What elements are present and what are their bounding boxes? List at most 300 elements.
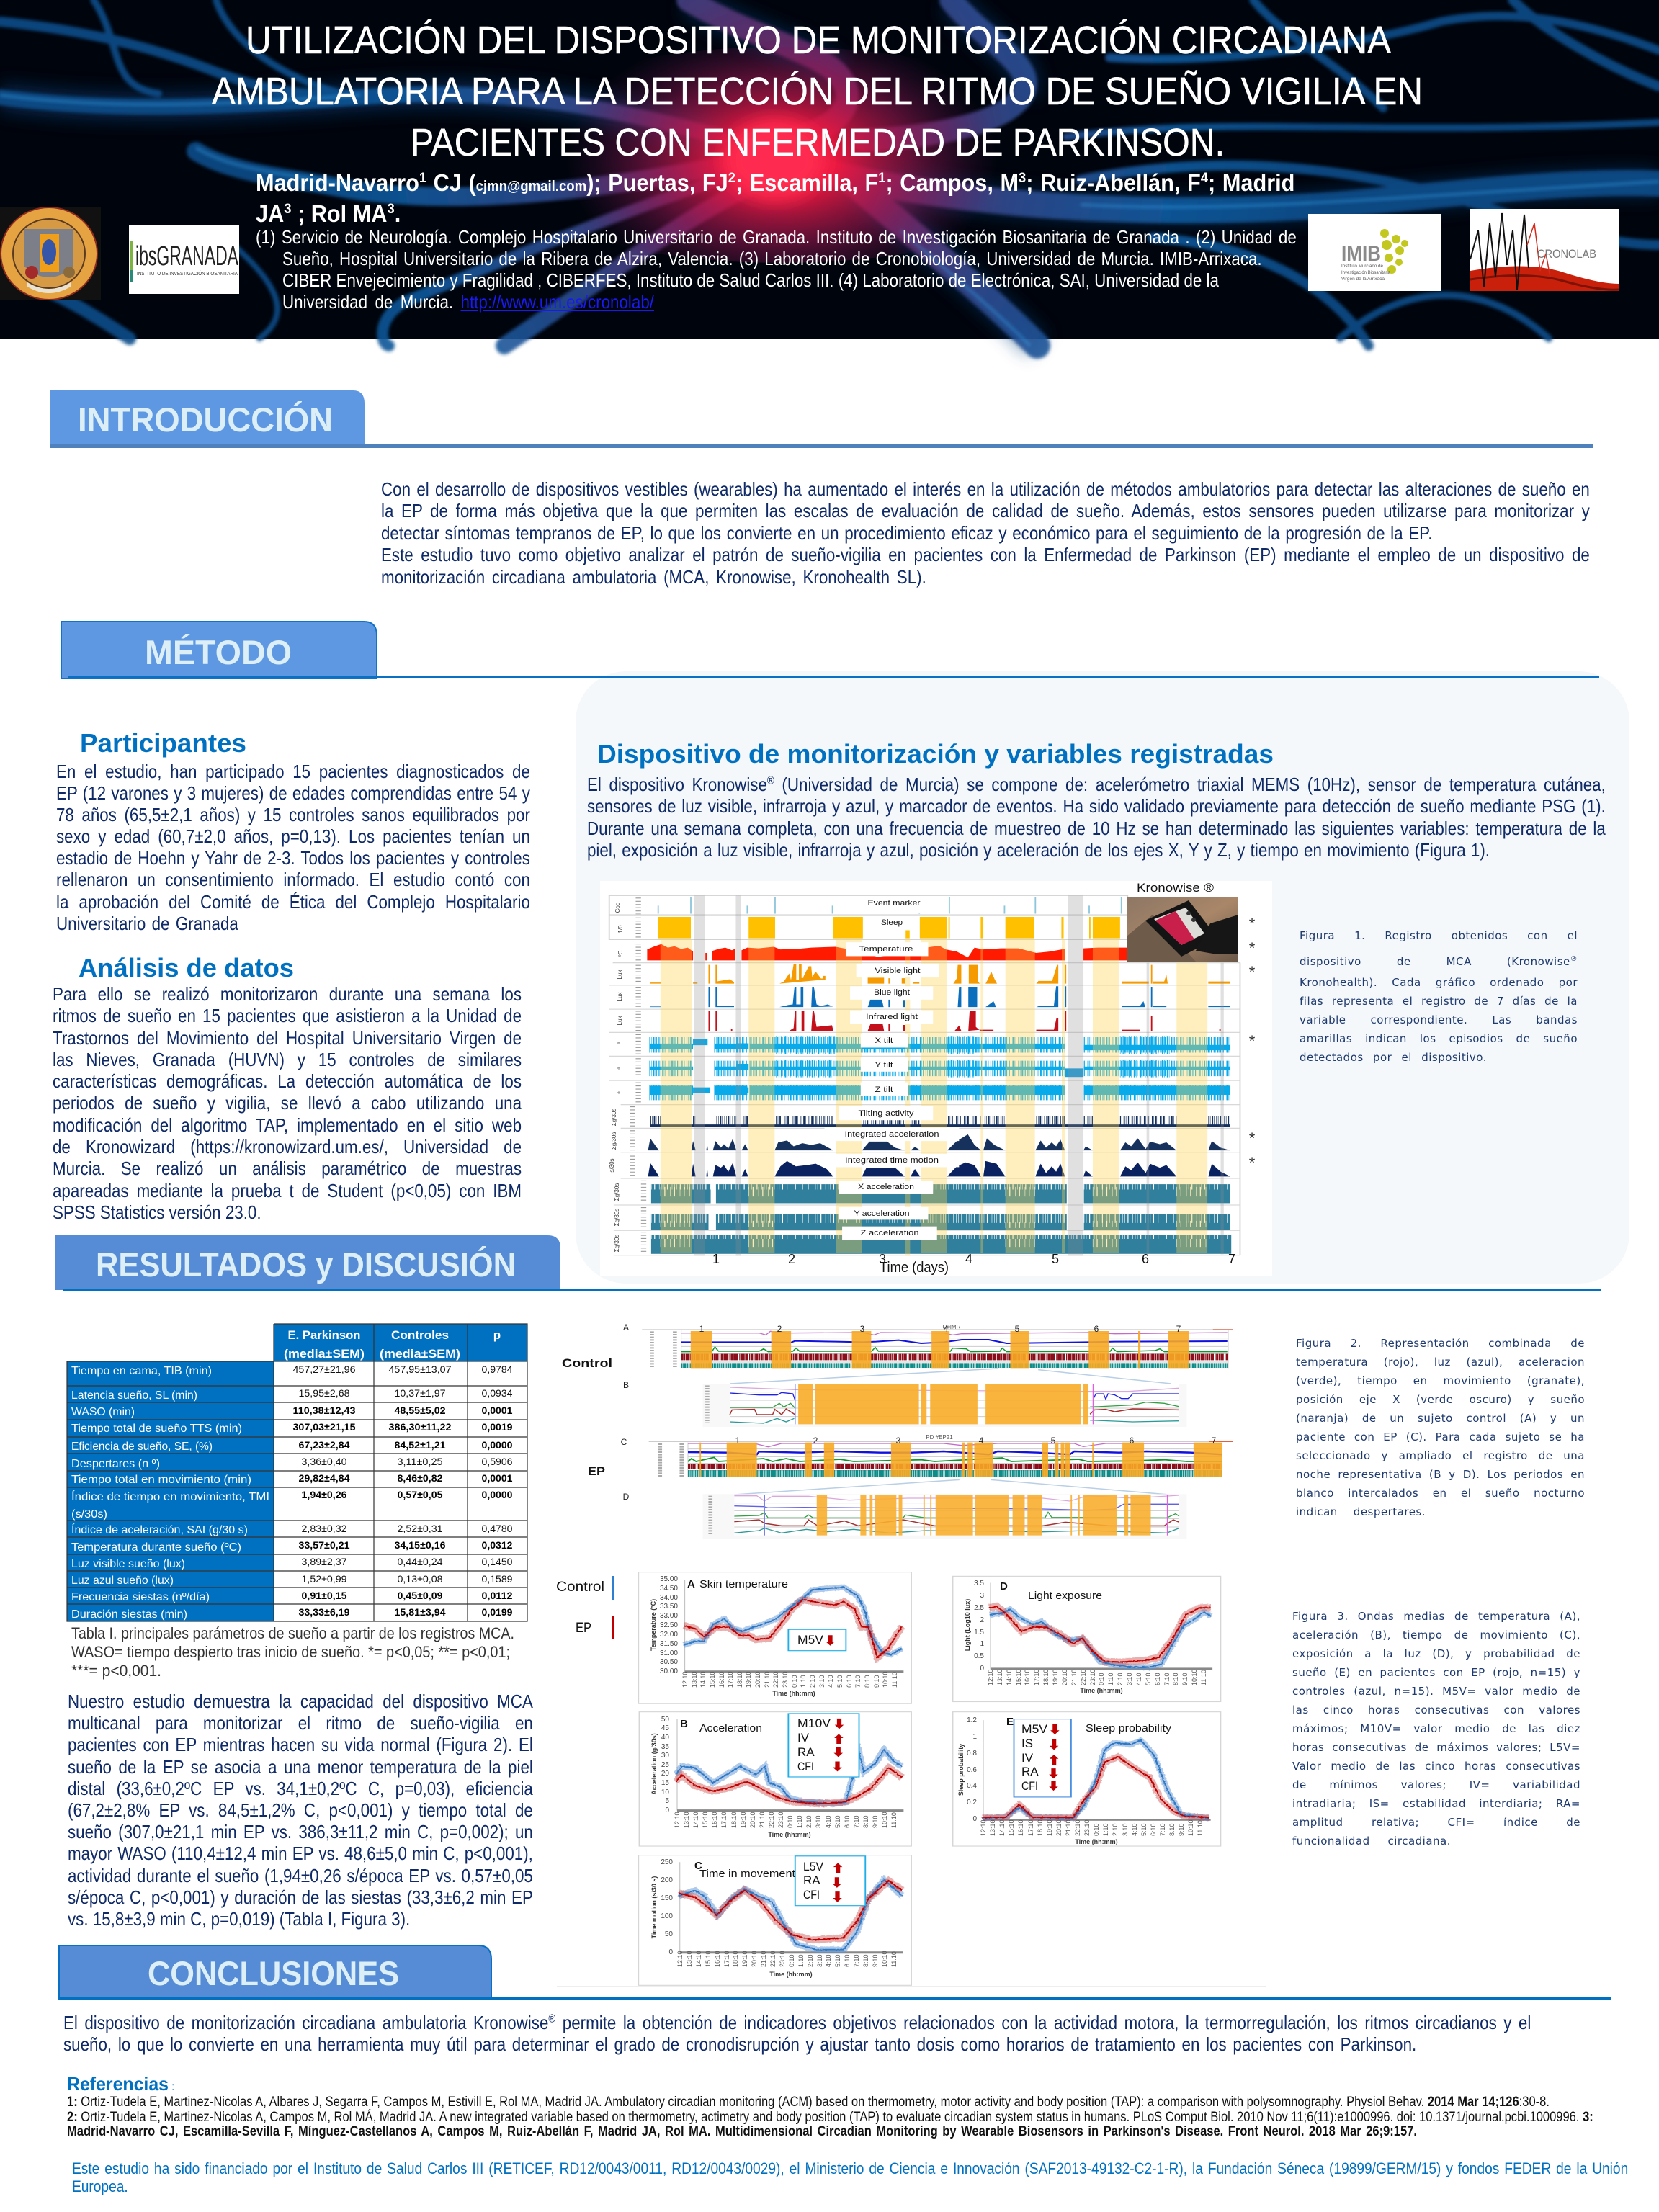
channel labels: Infrared light xyxy=(866,1013,918,1021)
text: introduction: Este estudio tuvo como objetivo analizar el patrón de sueño-vigilia en pacientes con la Enfermedad de Parkinson (EP) mediante el empleo de un dispositivo de xyxy=(381,544,1590,565)
section tab: RESULTADOS y DISCUSIÓN: RESULTADOS y DISCUSIÓN xyxy=(96,1245,516,1284)
channel labels: Visible light xyxy=(875,967,921,975)
day axis: 6 xyxy=(1142,1252,1149,1266)
chart A: skin temperature: 35.00 xyxy=(660,1575,678,1583)
figure 2 labels: 3 xyxy=(896,1436,901,1446)
chart B: acceleration: 40 xyxy=(661,1734,669,1742)
channel labels: Tilting activity xyxy=(859,1109,914,1118)
chart E: sleep probability: E xyxy=(1006,1716,1014,1728)
chart A: skin temperature: 14:10 xyxy=(699,1671,707,1688)
table values: 457,95±13,07 xyxy=(389,1364,452,1375)
chart A: skin temperature: 0:10 xyxy=(791,1675,798,1688)
figure 2 labels: A xyxy=(623,1322,629,1333)
chart D: light exposure: 15:10 xyxy=(1015,1669,1022,1685)
chart E: sleep probability: 1 xyxy=(972,1733,977,1741)
figure 2 labels: D xyxy=(623,1492,630,1502)
table values: 0,0019 xyxy=(481,1421,513,1433)
chart B: acceleration: 20:10 xyxy=(749,1812,756,1828)
chart D: light exposure: 21:10 xyxy=(1070,1669,1078,1685)
affiliations: (1) Servicio de Neurología. Complejo Hospitalario Universitario de Granada. Instituto de Investigación Biosanitaria de Granada . (2) Unidad de xyxy=(256,226,1297,248)
text: participants: En el estudio, han participado 15 pacientes diagnosticados de xyxy=(56,761,530,782)
table header: p xyxy=(493,1328,501,1342)
affiliations: Sueño, Hospital Universitario de la Ribera de Alzira, Valencia. (3) Laboratorio de Cronobiología, Universidad de Murcia. IMIB-Arrixaca. xyxy=(282,248,1262,269)
chart B: acceleration: 25 xyxy=(661,1761,669,1769)
chart C: time in movement: 1:10 xyxy=(797,1954,805,1967)
chart B: acceleration: 8:10 xyxy=(862,1815,869,1828)
table values: 15,81±3,94 xyxy=(395,1606,446,1618)
table values: 0,91±0,15 xyxy=(301,1590,347,1601)
chart A: skin temperature: 32.50 xyxy=(660,1621,678,1629)
channel axis titles: s/30s xyxy=(609,1158,615,1173)
chart E: sleep probability: 10:10 xyxy=(1187,1819,1194,1836)
section tab: INTRODUCCIÓN xyxy=(50,390,1593,448)
logo: ibsGRANADA: ibsGRANADA xyxy=(135,241,238,272)
chart B: acceleration: 11:10 xyxy=(890,1812,898,1828)
chart A: skin temperature: 18:10 xyxy=(736,1671,743,1688)
text: introduction: Con el desarrollo de dispositivos vestibles (wearables) ha aumentado el interés en la utilización de métodos ambulatorios para detectar las alteraciones de sueño en xyxy=(381,478,1590,500)
chart C: time in movement: 17:10 xyxy=(723,1951,730,1967)
chart B: acceleration: 0:10 xyxy=(787,1815,794,1828)
caption: figure 2: seleccionado y ampliado el registro de una xyxy=(1296,1449,1585,1462)
chart B: acceleration: 10:10 xyxy=(881,1812,888,1828)
chart E: sleep probability: RA xyxy=(1021,1765,1039,1778)
figure 2 labels: 7 xyxy=(1212,1436,1217,1446)
chart A: skin temperature: 33.50 xyxy=(660,1603,678,1611)
table caption xyxy=(71,1624,514,1680)
table row labels: Tiempo en cama, TIB (min) xyxy=(71,1365,212,1377)
chart C: time in movement: CFI xyxy=(803,1888,820,1902)
caption: figure 2 xyxy=(1296,1337,1585,1518)
chart B: acceleration: 16:10 xyxy=(711,1812,718,1828)
chart B: acceleration: RA xyxy=(797,1745,815,1759)
table values: 33,57±0,21 xyxy=(298,1539,350,1551)
channel axis titles: ºC xyxy=(617,950,624,957)
table caption: ***= p<0,001. xyxy=(71,1662,161,1680)
chart D: light exposure xyxy=(952,1576,1220,1701)
section tab: RESULTADOS y DISCUSIÓN xyxy=(55,1235,1601,1291)
title xyxy=(212,19,1423,164)
authors: Madrid-Navarro1 CJ (cjmn@gmail.com); Puertas, FJ2; Escamilla, F1; Campos, M3; Ruiz-Abellán, F4; Madrid xyxy=(256,169,1294,196)
chart C: time in movement: 250 xyxy=(661,1858,673,1866)
chart C: time in movement: 15:10 xyxy=(705,1951,712,1967)
figure 2 labels: 2 xyxy=(777,1324,782,1334)
caption: figure 2: temperatura (rojo), luz (azul), aceleracion xyxy=(1296,1356,1585,1369)
chart C: time in movement: 22:10 xyxy=(769,1951,777,1967)
figure 2 labels: 1 xyxy=(699,1324,705,1334)
table values: 110,38±12,43 xyxy=(292,1405,356,1416)
chart D: light exposure: 1.5 xyxy=(974,1629,984,1636)
chart E: sleep probability: M5V xyxy=(1021,1722,1048,1736)
figure 3 legend: Control xyxy=(556,1580,604,1595)
logo: IMIB: Investigación Biosanitaria xyxy=(1341,270,1390,275)
text: introduction xyxy=(381,478,1590,588)
chart A: skin temperature: 2:10 xyxy=(809,1675,816,1688)
figure 1: multichannel recording xyxy=(600,881,1272,1276)
chart B: acceleration: 17:10 xyxy=(720,1812,728,1828)
table grid xyxy=(67,1324,527,1621)
day axis: 4 xyxy=(965,1252,972,1266)
chart D: light exposure: 23:10 xyxy=(1089,1669,1096,1685)
text: device description: piel, exposición a luz visible, infrarroja y azul, posición y aceleración de los ejes X, Y y Z, y tiempo en movimiento (Figura 1). xyxy=(587,839,1490,861)
chart A: skin temperature: 16:10 xyxy=(718,1671,725,1688)
text: data analysis: las Nieves, Granada (HUVN) y 15 controles de similares xyxy=(53,1049,522,1070)
chart C: time in movement: 16:10 xyxy=(714,1951,721,1967)
day axis: 5 xyxy=(1052,1252,1059,1266)
channel labels: Sleep xyxy=(881,918,903,927)
chart A: skin temperature: 1:10 xyxy=(800,1675,807,1688)
chart D: light exposure: Light (Log10 lux) xyxy=(964,1599,971,1651)
text: references: 1: Ortiz-Tudela E, Martinez-Nicolas A, Albares J, Segarra F, Campos M, Estivill E, Rol MA, Madrid JA. Ambulatory circadian monitoring (ACM) based on thermometry, motor activity and body position (TAP): a comparison with polysomnography. Physiol Behav. 2014 Mar 14;126:30-8. xyxy=(67,2095,1550,2110)
chart A: skin temperature: Time (hh:mm) xyxy=(772,1690,815,1697)
caption: figure 3: las cinco horas consecutivas con valores xyxy=(1292,1703,1580,1716)
chart B: acceleration: 5:10 xyxy=(834,1815,841,1828)
chart B: acceleration: M10V xyxy=(797,1716,831,1730)
channel axis titles: 1/0 xyxy=(617,925,624,933)
chart C: time in movement xyxy=(638,1855,911,1985)
chart E: sleep probability: 1.2 xyxy=(967,1716,977,1724)
chart E: sleep probability: 16:10 xyxy=(1017,1819,1024,1836)
text: participants: rellenaron un consentimiento informado. El estudio contó con xyxy=(56,869,530,890)
figure 2 labels: 6 xyxy=(1094,1324,1099,1334)
temperature xyxy=(647,944,1127,960)
chart D: light exposure: 19:10 xyxy=(1052,1669,1059,1685)
text: data analysis: Murcia. Se realizó un análisis paramétrico de muestras xyxy=(53,1158,522,1179)
table values: 3,36±0,40 xyxy=(301,1456,347,1467)
figure 2 labels: 5 xyxy=(1051,1436,1056,1446)
text: device description: sensores de luz visible, infrarroja y azul, y marcador de eventos. Ha sido validado previamente para detección de sueño mediante PSG (1). xyxy=(587,795,1606,817)
channel axis titles: Σg/30s xyxy=(614,1209,620,1226)
figure 2 labels: 7 xyxy=(1176,1324,1181,1334)
table caption: WASO= tiempo despierto tras inicio de sueño. *= p<0,05; **= p<0,01; xyxy=(71,1643,510,1661)
table row labels: Duración siestas (min) xyxy=(71,1608,187,1621)
significance asterisks: * xyxy=(1249,1154,1256,1172)
chart C: time in movement: 8:10 xyxy=(862,1954,869,1967)
table values: 0,44±0,24 xyxy=(398,1556,443,1567)
table values: 0,1589 xyxy=(481,1573,513,1585)
logo: IMIB: IMIB xyxy=(1341,242,1381,266)
label: Control: Control xyxy=(562,1356,612,1370)
chart A: skin temperature: 12:10 xyxy=(681,1671,689,1688)
caption: figure 1: amarillas indican los episodios de sueño xyxy=(1300,1032,1578,1045)
caption: figure 1: variable correspondiente. Las bandas xyxy=(1300,1013,1578,1026)
authors: JA3 ; Rol MA3. xyxy=(256,200,401,227)
chart C: time in movement: 3:10 xyxy=(816,1954,823,1967)
caption: figure 3: sueño (E) en pacientes con EP (rojo, n=15) y xyxy=(1292,1666,1580,1679)
text: participants: EP (12 varones y 3 mujeres) de edades comprendidas entre 54 y xyxy=(56,782,530,804)
text: data analysis: de Kronowizard (https://kronowizard.um.es/, Universidad de xyxy=(53,1136,522,1158)
caption: figure 2: noche representativa (B y D). Los periodos en xyxy=(1296,1468,1585,1481)
figure 2 labels: 4 xyxy=(979,1436,984,1446)
table row labels: Despertares (n º) xyxy=(71,1458,160,1470)
chart D: light exposure: 7:10 xyxy=(1163,1673,1171,1685)
table values: 2,83±0,32 xyxy=(301,1523,347,1534)
text: participants: la aprobación del Comité de Ética del Complejo Hospitalario xyxy=(56,891,530,913)
text: data analysis: Para ello se realizó monitorizaron durante una semana los xyxy=(53,983,522,1005)
chart B: acceleration: CFI xyxy=(797,1760,814,1773)
day axis: 1 xyxy=(712,1252,720,1266)
chart E: sleep probability: 14:10 xyxy=(998,1819,1006,1836)
day axis: 7 xyxy=(1228,1252,1235,1266)
chart C: time in movement: 10:10 xyxy=(881,1951,888,1967)
chart C: time in movement: 19:10 xyxy=(741,1951,748,1967)
table values: 2,52±0,31 xyxy=(398,1523,443,1534)
chart C: time in movement: 200 xyxy=(661,1876,673,1884)
chart B: acceleration: Acceleration xyxy=(699,1722,762,1734)
table values: 0,0001 xyxy=(481,1472,513,1484)
text: conclusions: El dispositivo de monitorización circadiana ambulatoria Kronowise® permite la obtención de indicadores objetivos relacionados con la actividad motora, la termorregulación, los ritmos circadianos y el xyxy=(63,2012,1531,2033)
table values: 3,11±0,25 xyxy=(398,1456,443,1467)
title: UTILIZACIÓN DEL DISPOSITIVO DE MONITORIZACIÓN CIRCADIANA xyxy=(246,19,1391,62)
integrated acceleration xyxy=(648,1134,1230,1150)
chart C: time in movement: 5:10 xyxy=(834,1954,841,1967)
channel axis titles xyxy=(609,903,624,1252)
chart B: acceleration: 20 xyxy=(661,1770,669,1778)
channel axis titles: Σg/30s xyxy=(611,1132,617,1150)
chart A: skin temperature: 6:10 xyxy=(846,1675,853,1688)
figure 2 labels xyxy=(621,1322,1217,1502)
chart B: acceleration: 13:10 xyxy=(683,1812,690,1828)
chart C: time in movement: RA xyxy=(803,1873,820,1887)
caption: figure 1 xyxy=(1300,929,1578,1064)
heading: Análisis de datos: Análisis de datos xyxy=(79,953,294,982)
chart D: light exposure: 4:10 xyxy=(1135,1673,1142,1685)
text: data analysis: periodos de sueño y vigilia, se llevó a cabo utilizando una xyxy=(53,1092,522,1114)
chart D: light exposure: 3 xyxy=(980,1592,984,1600)
chart C: time in movement: L5V xyxy=(803,1860,824,1873)
table values: 1,94±0,26 xyxy=(301,1489,347,1500)
chart A: skin temperature: A xyxy=(687,1578,695,1590)
text: participants xyxy=(56,761,530,934)
text: introduction: la EP de forma más objetiva que la que permiten las escalas de evaluación de calidad de sueño. Además, estos sensores pueden utilizarse para monitorizar y xyxy=(381,500,1590,521)
figure 2 labels: 1 xyxy=(735,1436,741,1446)
chart D: light exposure: 0 xyxy=(980,1665,984,1673)
channel labels: Y tilt xyxy=(875,1061,893,1070)
channel axis titles: Σg/30s xyxy=(611,1109,617,1126)
table values: 0,0001 xyxy=(481,1405,513,1416)
table values: 307,03±21,15 xyxy=(292,1421,356,1433)
text: participants: Universitario de Granada xyxy=(56,913,238,934)
section tab: INTRODUCCIÓN: INTRODUCCIÓN xyxy=(78,400,333,439)
affiliations: CIBER Envejecimiento y Fragilidad , CIBERFES, Instituto de Salud Carlos III. (4) Laboratorio de Electrónica, SAI, Universidad de la xyxy=(282,269,1219,291)
caption: figure 2: posición eje X (verde oscuro) y sueño xyxy=(1296,1393,1585,1406)
significance asterisks: * xyxy=(1249,915,1256,933)
figure 3 legend xyxy=(556,1576,614,1639)
caption: figure 3: exposición a la luz (D), y probabilidad de xyxy=(1292,1647,1580,1660)
chart E: sleep probability: 0:10 xyxy=(1093,1823,1100,1836)
chart B: acceleration: 19:10 xyxy=(740,1812,747,1828)
text: data analysis: características demográficas. La detección automática de los xyxy=(53,1070,522,1092)
caption: figure 1: filas representa el registro de 7 días de la xyxy=(1300,995,1578,1008)
figure 2 labels: PD #EP21 xyxy=(926,1434,953,1441)
text: results discussion: actividad durante el sueño (1,94±0,26 s/época EP vs. 0,57±0,05 xyxy=(68,1865,533,1886)
chart E: sleep probability: Sleep probability xyxy=(957,1744,965,1796)
chart A: skin temperature: 22:10 xyxy=(772,1671,779,1688)
authors xyxy=(256,169,1294,227)
chart A: skin temperature: 19:10 xyxy=(745,1671,752,1688)
chart A: skin temperature: Temperature (ºC) xyxy=(650,1599,657,1651)
chart E: sleep probability: IV xyxy=(1021,1751,1034,1765)
figure 2 labels: 4 xyxy=(944,1324,949,1334)
text: funding xyxy=(72,2159,1628,2195)
tilt rows xyxy=(649,1042,1230,1093)
visible, blue and infrared light xyxy=(650,964,1230,984)
table values: 0,0112 xyxy=(481,1590,513,1601)
chart B: acceleration: 9:10 xyxy=(872,1815,879,1828)
table row labels: Luz azul sueño (lux) xyxy=(71,1575,174,1587)
chart B: acceleration xyxy=(640,1712,911,1846)
significance asterisks: * xyxy=(1249,963,1256,981)
chart A: skin temperature: 30.00 xyxy=(660,1667,678,1675)
table values: 0,45±0,09 xyxy=(398,1590,443,1601)
chart C: time in movement: 50 xyxy=(665,1930,673,1938)
chart E: sleep probability: 22:10 xyxy=(1074,1819,1081,1836)
chart A: skin temperature: 31.00 xyxy=(660,1649,678,1657)
text: funding: Europea. xyxy=(72,2177,128,2195)
section tab: MÉTODO xyxy=(61,622,1599,679)
chart E: sleep probability: 23:10 xyxy=(1083,1819,1091,1836)
table values: 29,82±4,84 xyxy=(298,1472,350,1484)
chart C: time in movement: 7:10 xyxy=(853,1954,860,1967)
logo: IMIB xyxy=(1308,214,1441,291)
channel labels: Integrated time motion xyxy=(845,1156,939,1165)
chart E: sleep probability: 6:10 xyxy=(1150,1823,1157,1836)
day axis: Time (days) xyxy=(880,1260,949,1276)
chart C: time in movement: Time motion (s/30 s) xyxy=(650,1876,658,1938)
chart C: time in movement: 4:10 xyxy=(825,1954,832,1967)
chart B: acceleration: 23:10 xyxy=(777,1812,784,1828)
chart C: time in movement: 23:10 xyxy=(779,1951,786,1967)
chart C: time in movement: 14:10 xyxy=(695,1951,702,1967)
text: introduction: detectar síntomas tempranos de EP, lo que los convierte en un procedimiento eficaz y económico para el seguimiento de la progresión de la EP. xyxy=(381,522,1432,544)
chart E: sleep probability: 21:10 xyxy=(1065,1819,1072,1836)
significance asterisks: * xyxy=(1249,939,1256,957)
table row labels xyxy=(71,1365,269,1621)
chart D: light exposure: 1 xyxy=(980,1640,984,1648)
chart D: light exposure: 8:10 xyxy=(1172,1673,1179,1685)
table values: 0,0199 xyxy=(481,1606,513,1618)
channel labels: Blue light xyxy=(874,988,910,997)
significance asterisks: * xyxy=(1249,1032,1256,1050)
table values: 0,1450 xyxy=(481,1556,513,1567)
chart E: sleep probability: 12:10 xyxy=(980,1819,987,1836)
caption: figure 1: detectados por el dispositivo. xyxy=(1300,1051,1487,1064)
chart A: skin temperature: 4:10 xyxy=(827,1675,834,1688)
text: data analysis: Trastornos del Movimiento del Hospital Universitario Virgen de xyxy=(53,1027,522,1049)
text: device description: Durante una semana completa, con una frecuencia de muestreo de 10 Hz se han determinado las siguientes variables: temperatura de la xyxy=(587,818,1606,839)
affiliations: Universidad de Murcia. http://www.um.es/cronolab/ xyxy=(282,291,654,313)
text: results discussion: sueño de la EP se asocia a una menor temperatura de la piel xyxy=(68,1756,533,1778)
heading: Referencias: Referencias xyxy=(67,2073,169,2095)
figure 3 legend: EP xyxy=(576,1621,591,1636)
text: funding: Este estudio ha sido financiado por el Instituto de Salud Carlos III (RETICEF, RD12/0043/0011, RD12/0043/0029), el Ministerio de Ciencia e Innovación (SAF2013-49132-C2-1-R), la Fundación Séneca (19899/GERM/15) y fondos FEDER de la Unión xyxy=(72,2159,1628,2177)
chart C: time in movement: 0 xyxy=(668,1948,673,1956)
chart E: sleep probability: 15:10 xyxy=(1008,1819,1015,1836)
logo: ibsGRANADA: INSTITUTO DE INVESTIGACIÓN BIOSANITARIA xyxy=(137,270,238,277)
text: results discussion: pacientes con EP mientras hacen su vida normal (Figura 2). El xyxy=(68,1734,533,1755)
table row labels: Eficiencia de sueño, SE, (%) xyxy=(71,1441,213,1453)
chart D: light exposure: 3:10 xyxy=(1126,1673,1133,1685)
caption: figure 3: controles (azul, n=15). M5V= valor medio de xyxy=(1292,1685,1580,1698)
figure 2 labels: 2 xyxy=(813,1436,818,1446)
section tab: CONCLUSIONES xyxy=(59,1945,1611,2000)
title: PACIENTES CON ENFERMEDAD DE PARKINSON. xyxy=(411,121,1225,164)
text: references: 2: Ortiz-Tudela E, Martinez-Nicolas A, Campos M, Rol MÁ, Madrid JA. A new integrated variable based on thermometry, actimetry and body position (TAP) to evaluate circadian system status in humans. PLoS Comput Biol. 2010 Nov 11;6(11):e1000996. doi: 10.1371/journal.pcbi.1000996. 3: xyxy=(67,2109,1593,2125)
chart E: sleep probability: 9:10 xyxy=(1178,1823,1185,1836)
chart C: time in movement: Time (hh:mm) xyxy=(769,1971,813,1978)
logo: IMIB: Instituto Murciano de xyxy=(1341,264,1383,269)
logo: Universidad de Granada crest xyxy=(0,207,101,300)
table values: 0,4780 xyxy=(481,1523,513,1534)
caption: figure 3: funcionalidad circadiana. xyxy=(1292,1835,1451,1848)
caption: figure 3: horas consecutivas de máximos valores; L5V= xyxy=(1292,1741,1580,1754)
channel axis titles: Lux xyxy=(617,970,623,979)
connector lines xyxy=(730,1369,1171,1495)
text: participants: estadio de Hoehn y Yahr de 2-3. Todos los pacientes y controles xyxy=(56,847,530,869)
heading: Dispositivo: Dispositivo de monitorización y variables registradas xyxy=(597,739,1274,769)
table values: 10,37±1,97 xyxy=(395,1387,446,1399)
chart D: light exposure: 2 xyxy=(980,1616,984,1624)
table header xyxy=(284,1328,501,1361)
chart A: skin temperature: M5V xyxy=(797,1633,824,1647)
table values: 67,23±2,84 xyxy=(298,1439,350,1451)
chart D: light exposure: 18:10 xyxy=(1042,1669,1050,1685)
chart D: light exposure: 16:10 xyxy=(1024,1669,1031,1685)
chart D: light exposure: 5:10 xyxy=(1145,1673,1152,1685)
chart D: light exposure: 11:10 xyxy=(1200,1670,1207,1685)
header banner with neuron background xyxy=(0,0,1659,346)
title: AMBULATORIA PARA LA DETECCIÓN DEL RITMO DE SUEÑO VIGILIA EN xyxy=(212,70,1423,113)
logo: Cronolab: CRONOLAB xyxy=(1537,247,1596,261)
text: results discussion: sueño (307,0±21,1 min EP vs. 386,3±11,2 min C, p=0,002); un xyxy=(68,1821,533,1842)
caption: figure 3: máximos; M10V= valor medio de las diez xyxy=(1292,1722,1580,1735)
table values: 34,15±0,16 xyxy=(395,1539,446,1551)
chart D: light exposure: Light exposure xyxy=(1028,1590,1102,1602)
chart C: time in movement: 12:10 xyxy=(676,1951,684,1967)
chart D: light exposure: 2:10 xyxy=(1117,1673,1124,1685)
label: EP: EP xyxy=(588,1464,605,1478)
chart B: acceleration: 3:10 xyxy=(815,1815,822,1828)
chart C: time in movement: Time in movement xyxy=(699,1868,796,1880)
text: results discussion xyxy=(68,1691,533,1930)
channel labels: X tilt xyxy=(875,1036,893,1045)
chart B: acceleration: 10 xyxy=(661,1788,669,1796)
table header: (media±SEM) xyxy=(380,1347,460,1361)
table values: 0,5906 xyxy=(481,1456,513,1467)
channel labels: Temperature xyxy=(859,945,913,954)
chart A: skin temperature: 34.00 xyxy=(660,1594,678,1602)
chart E: sleep probability: 13:10 xyxy=(989,1819,996,1836)
chart E: sleep probability: CFI xyxy=(1021,1779,1038,1793)
chart E: sleep probability: 2:10 xyxy=(1112,1823,1119,1836)
text: conclusions: sueño, lo que lo convierte en una herramienta muy útil para determinar el grado de cronodisrupción y ajustar tanto dosis como horarios de tratamiento en los pacientes con Parkinson. xyxy=(63,2033,1416,2055)
text: results discussion: multicanal para monitorizar el ritmo de sueño-vigilia en xyxy=(68,1712,533,1734)
section tab: CONCLUSIONES: CONCLUSIONES xyxy=(148,1954,399,1992)
chart A: skin temperature xyxy=(638,1572,911,1703)
chart B: acceleration: 22:10 xyxy=(768,1812,775,1828)
channel labels: X acceleration xyxy=(858,1183,914,1191)
chart D: light exposure: D xyxy=(1000,1580,1008,1593)
chart C: time in movement: 6:10 xyxy=(844,1954,851,1967)
chart D: light exposure: 14:10 xyxy=(1006,1669,1013,1685)
chart A: skin temperature: 8:10 xyxy=(864,1675,871,1688)
caption: figure 3: de mínimos valores; IV= variabilidad xyxy=(1292,1778,1580,1791)
chart B: acceleration: 14:10 xyxy=(692,1812,699,1828)
caption: figure 3 xyxy=(1292,1610,1580,1848)
chart B: acceleration: Acceleration (g/30s) xyxy=(650,1733,658,1795)
text: data analysis: SPSS Statistics versión 23.0. xyxy=(53,1201,261,1223)
table fills xyxy=(274,1324,527,1361)
device label: Kronowise ® xyxy=(1137,881,1215,895)
